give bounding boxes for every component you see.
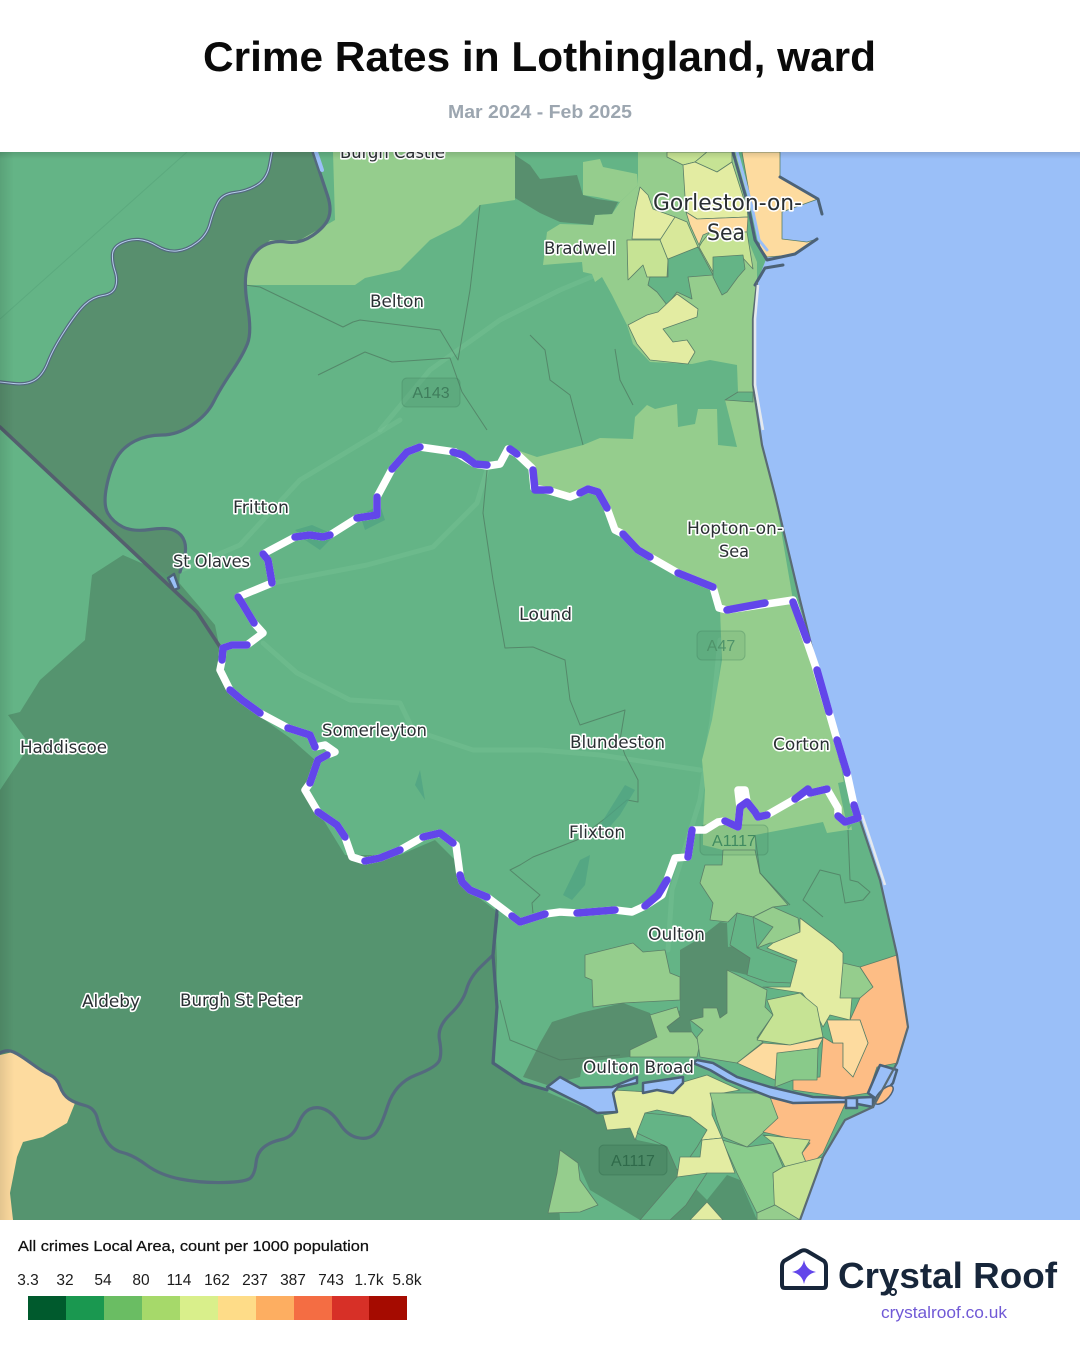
water and woodland patches bbox=[295, 505, 635, 900]
legend scale values: 5.8k bbox=[392, 1272, 422, 1289]
website url: crystalroof.co.uk bbox=[881, 1303, 1008, 1322]
place labels: Aldeby bbox=[82, 992, 140, 1012]
place labels: Gorleston-on- bbox=[653, 191, 802, 216]
legend scale values: 1.7k bbox=[354, 1272, 384, 1289]
map edge shading bbox=[0, 152, 1080, 1220]
area: south-west peach ward bbox=[0, 1052, 75, 1220]
place labels: Hopton-on- bbox=[687, 519, 783, 539]
logo: Crystal Roof bbox=[782, 1250, 1058, 1322]
water features: lake lothing and Oulton Broad bbox=[168, 574, 897, 1113]
area: Corton light ward bbox=[702, 600, 852, 850]
legend title: All crimes Local Area, count per 1000 population bbox=[18, 1238, 369, 1255]
legend scale values: 162 bbox=[204, 1272, 230, 1289]
icon: house bbox=[782, 1250, 826, 1288]
place labels: Somerleyton bbox=[322, 721, 427, 741]
place labels: Haddiscoe bbox=[20, 738, 107, 758]
place labels: Lound bbox=[519, 605, 572, 625]
wordmark: Crystal Roof bbox=[838, 1255, 1058, 1296]
area: Belton light ward bbox=[245, 152, 515, 285]
place labels: Oulton bbox=[648, 925, 705, 945]
road shields bbox=[402, 378, 768, 1175]
title: Crime Rates in Lothingland, ward bbox=[203, 33, 876, 80]
shield A143: A143 bbox=[412, 385, 450, 402]
shield A1117 south bbox=[599, 1145, 667, 1175]
shield A143 bbox=[402, 378, 460, 407]
place labels: Flixton bbox=[569, 823, 625, 843]
ward boundary: white base line bbox=[220, 447, 858, 922]
place labels bbox=[20, 143, 830, 1078]
legend bbox=[17, 1238, 422, 1320]
rivers bbox=[0, 152, 822, 1183]
place labels: Burgh St Peter bbox=[180, 991, 301, 1011]
area: dark block at Oulton bbox=[667, 922, 750, 1032]
place labels: Bradwell bbox=[544, 239, 616, 259]
place labels: Oulton Broad bbox=[583, 1058, 694, 1078]
place labels: Fritton bbox=[233, 498, 289, 518]
area: Corton coastal strip bbox=[838, 782, 852, 830]
place labels: St Olaves bbox=[173, 552, 250, 572]
legend scale values: 743 bbox=[318, 1272, 344, 1289]
area: north light block bbox=[583, 159, 638, 202]
shield A1117 north: A1117 bbox=[712, 833, 756, 850]
shield A47 bbox=[697, 631, 745, 660]
legend scale values: 387 bbox=[280, 1272, 306, 1289]
subtitle: date range: Mar 2024 - Feb 2025 bbox=[448, 102, 632, 122]
legend scale values: 3.3 bbox=[17, 1272, 39, 1289]
place labels: Corton bbox=[773, 735, 830, 755]
icon: purple star bbox=[792, 1260, 816, 1284]
ward boundary lines bbox=[245, 205, 870, 1060]
ward boundary: purple dashes bbox=[222, 447, 858, 922]
area: Gorleston wards bbox=[627, 152, 818, 402]
legend scale values: 80 bbox=[132, 1272, 150, 1289]
shield A47: A47 bbox=[707, 638, 735, 655]
area: dark patch north of Bradwell bbox=[515, 155, 618, 225]
place labels: Belton bbox=[370, 292, 424, 312]
place labels: Sea bbox=[707, 221, 745, 246]
road network bbox=[0, 152, 720, 950]
place labels: Sea bbox=[719, 542, 749, 562]
wordmark key detail bbox=[890, 1289, 896, 1295]
area: Oulton and Lowestoft wards bbox=[548, 850, 908, 1220]
legend scale values: 114 bbox=[167, 1272, 192, 1289]
place labels: Burgh Castle bbox=[340, 143, 445, 163]
legend scale values bbox=[17, 1272, 422, 1289]
area: dark block north of Oulton Broad bbox=[523, 1003, 657, 1085]
shield A1117 north bbox=[700, 825, 768, 855]
beach sliver bbox=[755, 285, 885, 885]
legend scale values: 32 bbox=[56, 1272, 74, 1289]
legend scale values: 54 bbox=[94, 1272, 112, 1289]
harbour pier bbox=[874, 1085, 894, 1105]
legend colour bar bbox=[28, 1296, 407, 1320]
choropleth map bbox=[0, 143, 1080, 1220]
legend scale values: 237 bbox=[242, 1272, 268, 1289]
area: north-west river marshes, darkest band bbox=[0, 152, 330, 614]
land base bbox=[0, 152, 908, 1220]
place labels: Blundeston bbox=[570, 733, 665, 753]
sea bbox=[755, 152, 1080, 1220]
coastline bbox=[753, 282, 908, 1220]
shield A1117 south: A1117 bbox=[611, 1153, 655, 1170]
area: south-west dark district bbox=[0, 555, 757, 1220]
area: north-east coastal light wards bbox=[508, 152, 793, 610]
